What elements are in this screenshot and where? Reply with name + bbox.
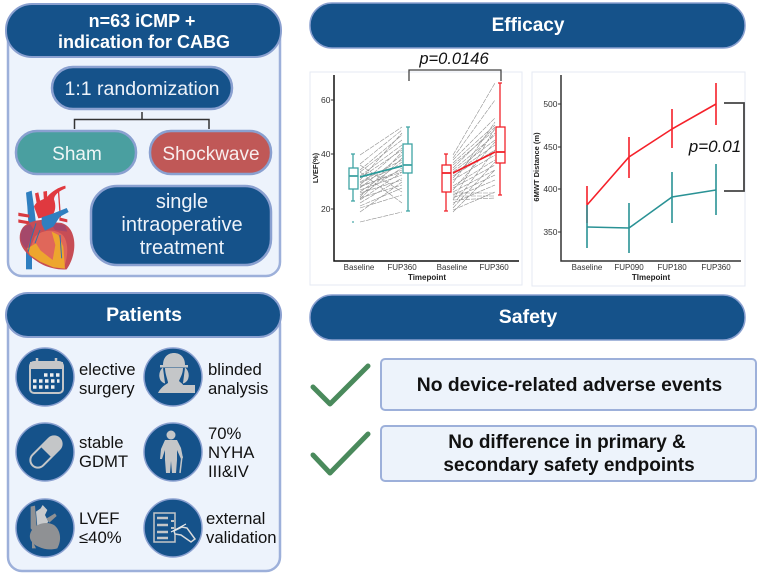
chart: six minute walk distance: 400 (543, 184, 558, 194)
text: elective surgery: surgery (79, 379, 135, 398)
text: NYHA class: 70% (208, 424, 242, 443)
randomization pill: 1:1 randomization (64, 78, 220, 100)
icon: grey heart (16, 499, 74, 557)
sham pill: Sham (52, 144, 102, 165)
chart: LVEF boxplots: 40 (321, 149, 331, 159)
randomization tree connector (74, 112, 209, 129)
icon: checklist and hand (144, 499, 202, 557)
heading: efficacy: Efficacy (492, 15, 565, 36)
chart: LVEF boxplots: 20 (321, 204, 331, 214)
mean line: shockwave (453, 152, 495, 173)
text: external validation: external (206, 509, 265, 528)
text: blinded analysis: analysis (208, 379, 268, 398)
text: stable GDMT: stable (79, 433, 124, 452)
chart: LVEF boxplots (310, 72, 522, 285)
boxplot: shockwave follow-up (496, 83, 505, 195)
panel: patients (6, 293, 281, 571)
icon: elderly person (144, 423, 202, 481)
boxplot: sham follow-up (403, 127, 412, 211)
chart: six minute walk distance: FUP090 (614, 263, 644, 272)
icon: check mark two (313, 434, 368, 473)
chart: six minute walk distance: 450 (543, 142, 558, 152)
randomization pill (52, 67, 232, 109)
bracket: walk distance comparison: p=0.01 (688, 137, 741, 156)
chart: six minute walk distance: FUP360 (701, 263, 731, 272)
shockwave pill (150, 131, 271, 174)
text: LVEF threshold: LVEF (79, 509, 120, 528)
icon: blinded analyst (144, 348, 202, 406)
chart: six minute walk distance: FUP180 (657, 263, 687, 272)
treatment pill (91, 186, 271, 265)
chart: LVEF boxplots: 60 (321, 95, 331, 105)
text: NYHA class: NYHA (208, 443, 255, 462)
shockwave pill: Shockwave (162, 144, 260, 165)
callout: no safety difference: No difference in primary & (448, 432, 686, 453)
chart: six minute walk distance: Baseline (572, 263, 603, 272)
icon: anatomical heart (18, 186, 74, 269)
chart: LVEF boxplots: Baseline (437, 263, 468, 272)
text: LVEF threshold (79, 509, 122, 547)
bracket: walk distance comparison (688, 103, 744, 191)
text: blinded analysis (208, 360, 268, 398)
chart: six minute walk distance: 500 (543, 99, 558, 109)
heading: patients (6, 293, 281, 337)
chart: six minute walk distance: 6MWT Distance (m) (532, 132, 541, 202)
bracket: LVEF comparison: p=0.0146 (418, 50, 489, 68)
mean line: sham (360, 166, 402, 177)
series: sham (587, 164, 716, 253)
icon: capsule (16, 423, 74, 481)
treatment pill: treatment (140, 237, 225, 259)
treatment pill: single (156, 191, 208, 213)
text: stable GDMT: GDMT (79, 452, 128, 471)
bracket: LVEF comparison (409, 50, 501, 81)
text: external validation: validation (206, 528, 277, 547)
heading: n=63 iCMP: n=63 iCMP + (89, 11, 195, 31)
heading: n=63 iCMP (6, 4, 281, 57)
chart: LVEF boxplots: LVEF(%) (311, 152, 320, 183)
chart: LVEF boxplots: Baseline (344, 263, 375, 272)
callout: no device events: No device-related adverse events (417, 375, 722, 396)
text: external validation (206, 509, 277, 547)
chart: LVEF boxplots: Timepoint (408, 273, 446, 282)
text: blinded analysis: blinded (208, 360, 262, 379)
dot: sham outlier (352, 221, 354, 223)
icon: check mark one (313, 366, 368, 404)
panel: study design (6, 4, 281, 276)
text: NYHA class (208, 424, 255, 481)
chart: six minute walk distance: TImepoint (632, 273, 670, 282)
chart: LVEF boxplots: FUP360 (479, 263, 509, 272)
callout: no device events (381, 359, 756, 410)
chart: LVEF boxplots: FUP360 (387, 263, 417, 272)
text: LVEF threshold: ≤40% (79, 528, 122, 547)
heading: safety: Safety (499, 306, 557, 328)
patient lines: shockwave (453, 83, 495, 212)
chart: six minute walk distance: 350 (543, 227, 558, 237)
heading: patients: Patients (106, 304, 182, 326)
heading: safety (310, 295, 745, 340)
icon: calendar (16, 348, 74, 406)
callout: no safety difference (381, 426, 756, 481)
boxplot: shockwave baseline (442, 154, 451, 211)
series: shockwave (587, 83, 716, 223)
text: NYHA class: III&IV (208, 462, 250, 481)
text: elective surgery (79, 360, 136, 398)
heading: efficacy (310, 3, 745, 48)
patient lines: sham (360, 127, 402, 222)
chart: six minute walk distance (532, 72, 745, 286)
text: stable GDMT (79, 433, 128, 471)
heading: n=63 iCMP: indication for CABG (58, 32, 230, 52)
treatment pill: intraoperative (121, 214, 243, 236)
boxplot: sham baseline (349, 154, 358, 201)
text: elective surgery: elective (79, 360, 136, 379)
sham pill (16, 131, 136, 174)
callout: no safety difference: secondary safety endpoints (443, 455, 695, 476)
